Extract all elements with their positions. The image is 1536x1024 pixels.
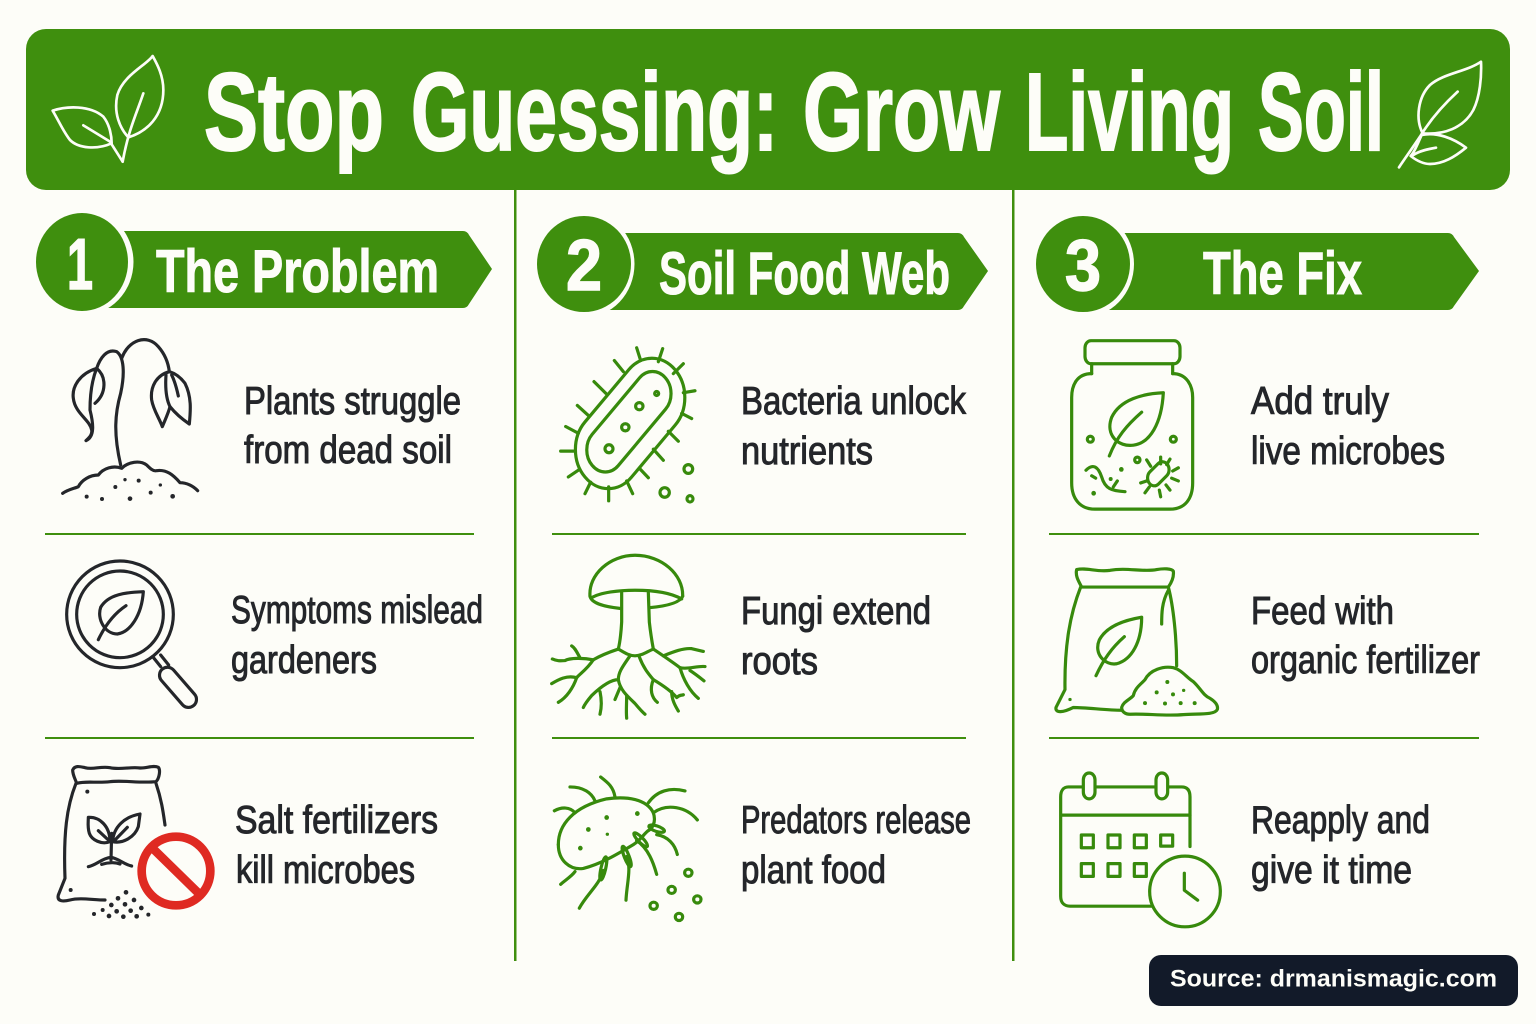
panel: the problem: [30, 208, 492, 919]
text: organic fertilizer: Feed with: [1251, 590, 1394, 633]
icon: leaves left: [53, 56, 163, 162]
section header 2: 2: [566, 226, 602, 306]
text: predators: [741, 799, 971, 892]
text: symptoms mislead: Symptoms mislead: [231, 589, 483, 632]
icon: salt fertilizer bag with prohibition sign: [58, 766, 210, 919]
text: symptoms mislead: gardeners: [231, 639, 377, 682]
icon: leaves right: [1399, 62, 1481, 167]
icon: calendar and clock: [1061, 773, 1220, 927]
icon: soil mite: [554, 777, 701, 920]
source badge: [1149, 955, 1518, 1006]
icon: magnifier over leaf: [67, 561, 200, 711]
text: plants struggle: Plants struggle: [244, 380, 461, 423]
title: [204, 51, 1384, 174]
text: predators: Predators release: [741, 799, 971, 842]
text: salt fertilizers: Salt fertilizers: [235, 799, 438, 842]
title: Living: [1025, 51, 1234, 174]
divider: [45, 737, 474, 739]
title: Soil: [1258, 51, 1384, 174]
title: Grow: [803, 51, 1000, 174]
section header 1: [30, 208, 492, 316]
title: Stop: [204, 51, 384, 174]
text: reapply: give it time: [1251, 849, 1412, 892]
title banner: [26, 29, 1510, 190]
text: predators: plant food: [741, 849, 886, 892]
divider: [1049, 737, 1479, 739]
section header 1: 1: [67, 225, 93, 305]
text: salt fertilizers: kill microbes: [236, 849, 415, 892]
icon: mushroom with roots: [552, 555, 705, 718]
title: Guessing:: [411, 51, 778, 174]
divider: [552, 533, 966, 535]
text: fungi: [741, 590, 931, 683]
text: symptoms mislead: [231, 589, 483, 682]
column separators: [514, 188, 1014, 961]
text: organic fertilizer: [1251, 590, 1480, 682]
source badge: Source: drmanismagic.com: [1170, 966, 1497, 992]
panel: the fix: [1032, 210, 1480, 927]
divider: [552, 737, 966, 739]
section header 2: [534, 210, 988, 318]
text: plants struggle: [244, 380, 461, 472]
icon: wilting plant: [63, 340, 198, 501]
icon: organic fertilizer bag: [1056, 569, 1218, 715]
section header 3: [1032, 210, 1479, 318]
icon: jar of microbes: [1072, 341, 1193, 509]
section header 3: 3: [1065, 226, 1101, 306]
text: live microbes: live microbes: [1251, 430, 1445, 473]
section header 2: Soil Food Web: [659, 240, 950, 307]
text: bacteria: nutrients: [741, 430, 873, 473]
icon: bacteria: [561, 342, 698, 505]
text: plants struggle: from dead soil: [244, 429, 452, 472]
text: fungi: roots: [741, 640, 818, 683]
text: live microbes: Add truly: [1251, 380, 1389, 423]
text: reapply: [1251, 799, 1430, 892]
panel: soil food web: [534, 210, 988, 920]
text: organic fertilizer: organic fertilizer: [1251, 639, 1480, 682]
section header 1: The Problem: [156, 238, 439, 305]
text: bacteria: [741, 380, 966, 473]
divider: [45, 533, 474, 535]
section header 3: The Fix: [1203, 240, 1362, 307]
text: reapply: Reapply and: [1251, 799, 1430, 842]
text: live microbes: [1251, 380, 1445, 473]
text: bacteria: Bacteria unlock: [741, 380, 966, 423]
divider: [1049, 533, 1479, 535]
text: salt fertilizers: [235, 799, 438, 892]
text: fungi: Fungi extend: [741, 590, 931, 633]
